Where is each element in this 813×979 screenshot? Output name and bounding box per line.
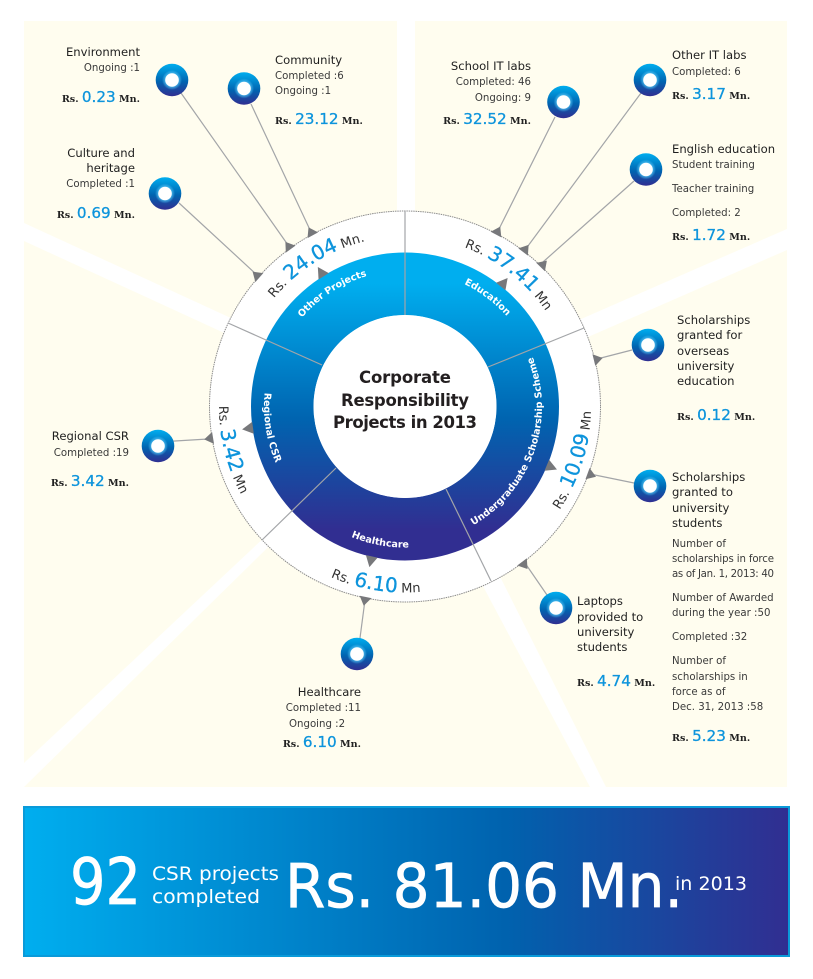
text: other IT labs: Rs. 3.17 Mn. bbox=[672, 85, 750, 103]
text: regional CSR: Regional CSR bbox=[52, 429, 129, 443]
text: regional CSR: Rs. 3.42 Mn. bbox=[51, 472, 129, 490]
text: university scholarships: granted to bbox=[672, 485, 733, 499]
summary banner: CSR projects bbox=[152, 863, 279, 885]
text: healthcare: Completed :11 bbox=[286, 703, 361, 714]
icon: laptops node bbox=[540, 592, 572, 624]
icon: environment node bbox=[156, 64, 188, 96]
text: english education: Student training bbox=[672, 160, 755, 171]
text: community: Rs. 23.12 Mn. bbox=[275, 110, 363, 128]
text: overseas scholarships: overseas bbox=[677, 344, 729, 358]
summary banner: in 2013 bbox=[675, 873, 747, 895]
text: community bbox=[275, 53, 363, 128]
segment label: healthcare: Healthcare bbox=[352, 530, 408, 548]
text: overseas scholarships: education bbox=[677, 374, 735, 388]
center title: Responsibility bbox=[341, 391, 469, 410]
text: school IT labs bbox=[443, 59, 531, 128]
text: other IT labs: Completed: 6 bbox=[672, 67, 741, 78]
text: university scholarships: Rs. 5.23 Mn. bbox=[672, 727, 750, 745]
text: environment: Ongoing :1 bbox=[84, 63, 140, 74]
icon: healthcare node bbox=[341, 638, 373, 670]
icon: english education node bbox=[630, 153, 662, 186]
center title: Corporate bbox=[359, 368, 451, 387]
text: university scholarships bbox=[672, 470, 774, 745]
text: overseas scholarships: university bbox=[677, 359, 734, 373]
text: overseas scholarships: Rs. 0.12 Mn. bbox=[677, 406, 755, 424]
summary banner: 92 bbox=[70, 846, 141, 920]
text: school IT labs: Completed: 46 bbox=[456, 77, 531, 88]
center title: Projects in 2013 bbox=[333, 413, 477, 432]
text: other IT labs bbox=[672, 48, 750, 103]
icon: regional CSR node bbox=[142, 430, 174, 462]
ring value: other projects: Rs. 24.04 Mn. bbox=[268, 236, 364, 298]
inner marker triangles bbox=[241, 264, 559, 568]
text: environment bbox=[62, 45, 140, 106]
text: university scholarships: students bbox=[672, 516, 722, 530]
text: community: Community bbox=[275, 53, 342, 67]
text: regional CSR bbox=[51, 429, 129, 490]
text: english education bbox=[671, 142, 775, 244]
icon: other IT labs node bbox=[634, 64, 666, 96]
summary banner: Rs. 81.06 Mn. bbox=[285, 851, 683, 922]
text: laptops: provided to bbox=[577, 610, 643, 624]
text: healthcare: Healthcare bbox=[298, 685, 361, 699]
text: community: Completed :6 bbox=[275, 71, 344, 82]
text: university scholarships: scholarships in bbox=[672, 672, 748, 683]
icon: university scholarships node bbox=[634, 470, 666, 502]
text: university scholarships: Scholarships bbox=[672, 470, 745, 484]
text: culture and heritage bbox=[57, 146, 135, 222]
text: english education: Rs. 1.72 Mn. bbox=[672, 226, 750, 244]
text: laptops: Rs. 4.74 Mn. bbox=[577, 672, 655, 690]
text: community: Ongoing :1 bbox=[275, 86, 331, 97]
text: university scholarships: scholarships in force bbox=[672, 554, 774, 565]
segment label: undergraduate scholarship scheme: Undergraduate Scholarship Scheme bbox=[470, 358, 544, 524]
text: university scholarships: during the year :50 bbox=[672, 608, 770, 619]
text: university scholarships: university bbox=[672, 501, 729, 515]
ring value: regional CSR: Rs. 3.42 Mn bbox=[219, 407, 246, 494]
text: school IT labs: School IT labs bbox=[451, 59, 531, 73]
text: overseas scholarships: granted for bbox=[677, 328, 742, 342]
text: university scholarships: force as of bbox=[672, 687, 726, 698]
icon: community node bbox=[228, 72, 260, 105]
text: university scholarships: Completed :32 bbox=[672, 632, 747, 643]
segment label: regional CSR: Regional CSR bbox=[262, 394, 282, 463]
text: laptops bbox=[577, 594, 655, 690]
text: overseas scholarships: Scholarships bbox=[677, 313, 750, 327]
icon: overseas scholarships node bbox=[632, 329, 664, 361]
icon: culture node bbox=[149, 177, 181, 210]
text: other IT labs: Other IT labs bbox=[672, 48, 747, 62]
summary banner: completed bbox=[152, 886, 260, 908]
outer marker triangles bbox=[203, 224, 604, 607]
text: culture and heritage: Rs. 0.69 Mn. bbox=[57, 204, 135, 222]
text: school IT labs: Rs. 32.52 Mn. bbox=[443, 110, 531, 128]
text: healthcare bbox=[283, 685, 361, 751]
text: regional CSR: Completed :19 bbox=[54, 448, 129, 459]
ring value: healthcare: Rs. 6.10 Mn bbox=[332, 568, 420, 592]
text: university scholarships: Number of bbox=[672, 656, 726, 667]
text: university scholarships: Dec. 31, 2013 :58 bbox=[672, 702, 763, 713]
text: culture and heritage: heritage bbox=[86, 161, 135, 175]
text: english education: English education bbox=[672, 142, 775, 156]
donut chart bbox=[210, 211, 600, 602]
ring value: education: Rs. 37.41 Mn bbox=[466, 238, 550, 310]
text: culture and heritage: Culture and bbox=[67, 146, 135, 160]
leader lines bbox=[142, 93, 641, 638]
text: environment: Rs. 0.23 Mn. bbox=[62, 88, 140, 106]
text: university scholarships: as of Jan. 1, 2013: 40 bbox=[672, 569, 774, 580]
text: school IT labs: Ongoing: 9 bbox=[475, 93, 531, 104]
text: healthcare: Rs. 6.10 Mn. bbox=[283, 733, 361, 751]
center title bbox=[333, 368, 477, 432]
segment label: education: Education bbox=[464, 278, 510, 316]
summary banner bbox=[24, 807, 789, 956]
background panels bbox=[24, 21, 787, 787]
icon: school IT labs node bbox=[547, 86, 580, 118]
text: healthcare: Ongoing :2 bbox=[289, 719, 345, 730]
text: university scholarships: Number of bbox=[672, 539, 726, 550]
text: overseas scholarships bbox=[677, 313, 755, 424]
text: culture and heritage: Completed :1 bbox=[66, 179, 135, 190]
segment label: other projects: Other Projects bbox=[298, 271, 366, 316]
text: english education: Completed: 2 bbox=[672, 208, 741, 219]
text: university scholarships: Number of Awarded bbox=[672, 593, 774, 604]
text: laptops: Laptops bbox=[577, 594, 623, 608]
text: laptops: university bbox=[577, 625, 634, 639]
text: laptops: students bbox=[577, 640, 627, 654]
text: english education: Teacher training bbox=[671, 184, 754, 195]
ring value: undergraduate scholarship: Rs. 10.09 Mn bbox=[552, 412, 591, 509]
text: environment: Environment bbox=[66, 45, 140, 59]
